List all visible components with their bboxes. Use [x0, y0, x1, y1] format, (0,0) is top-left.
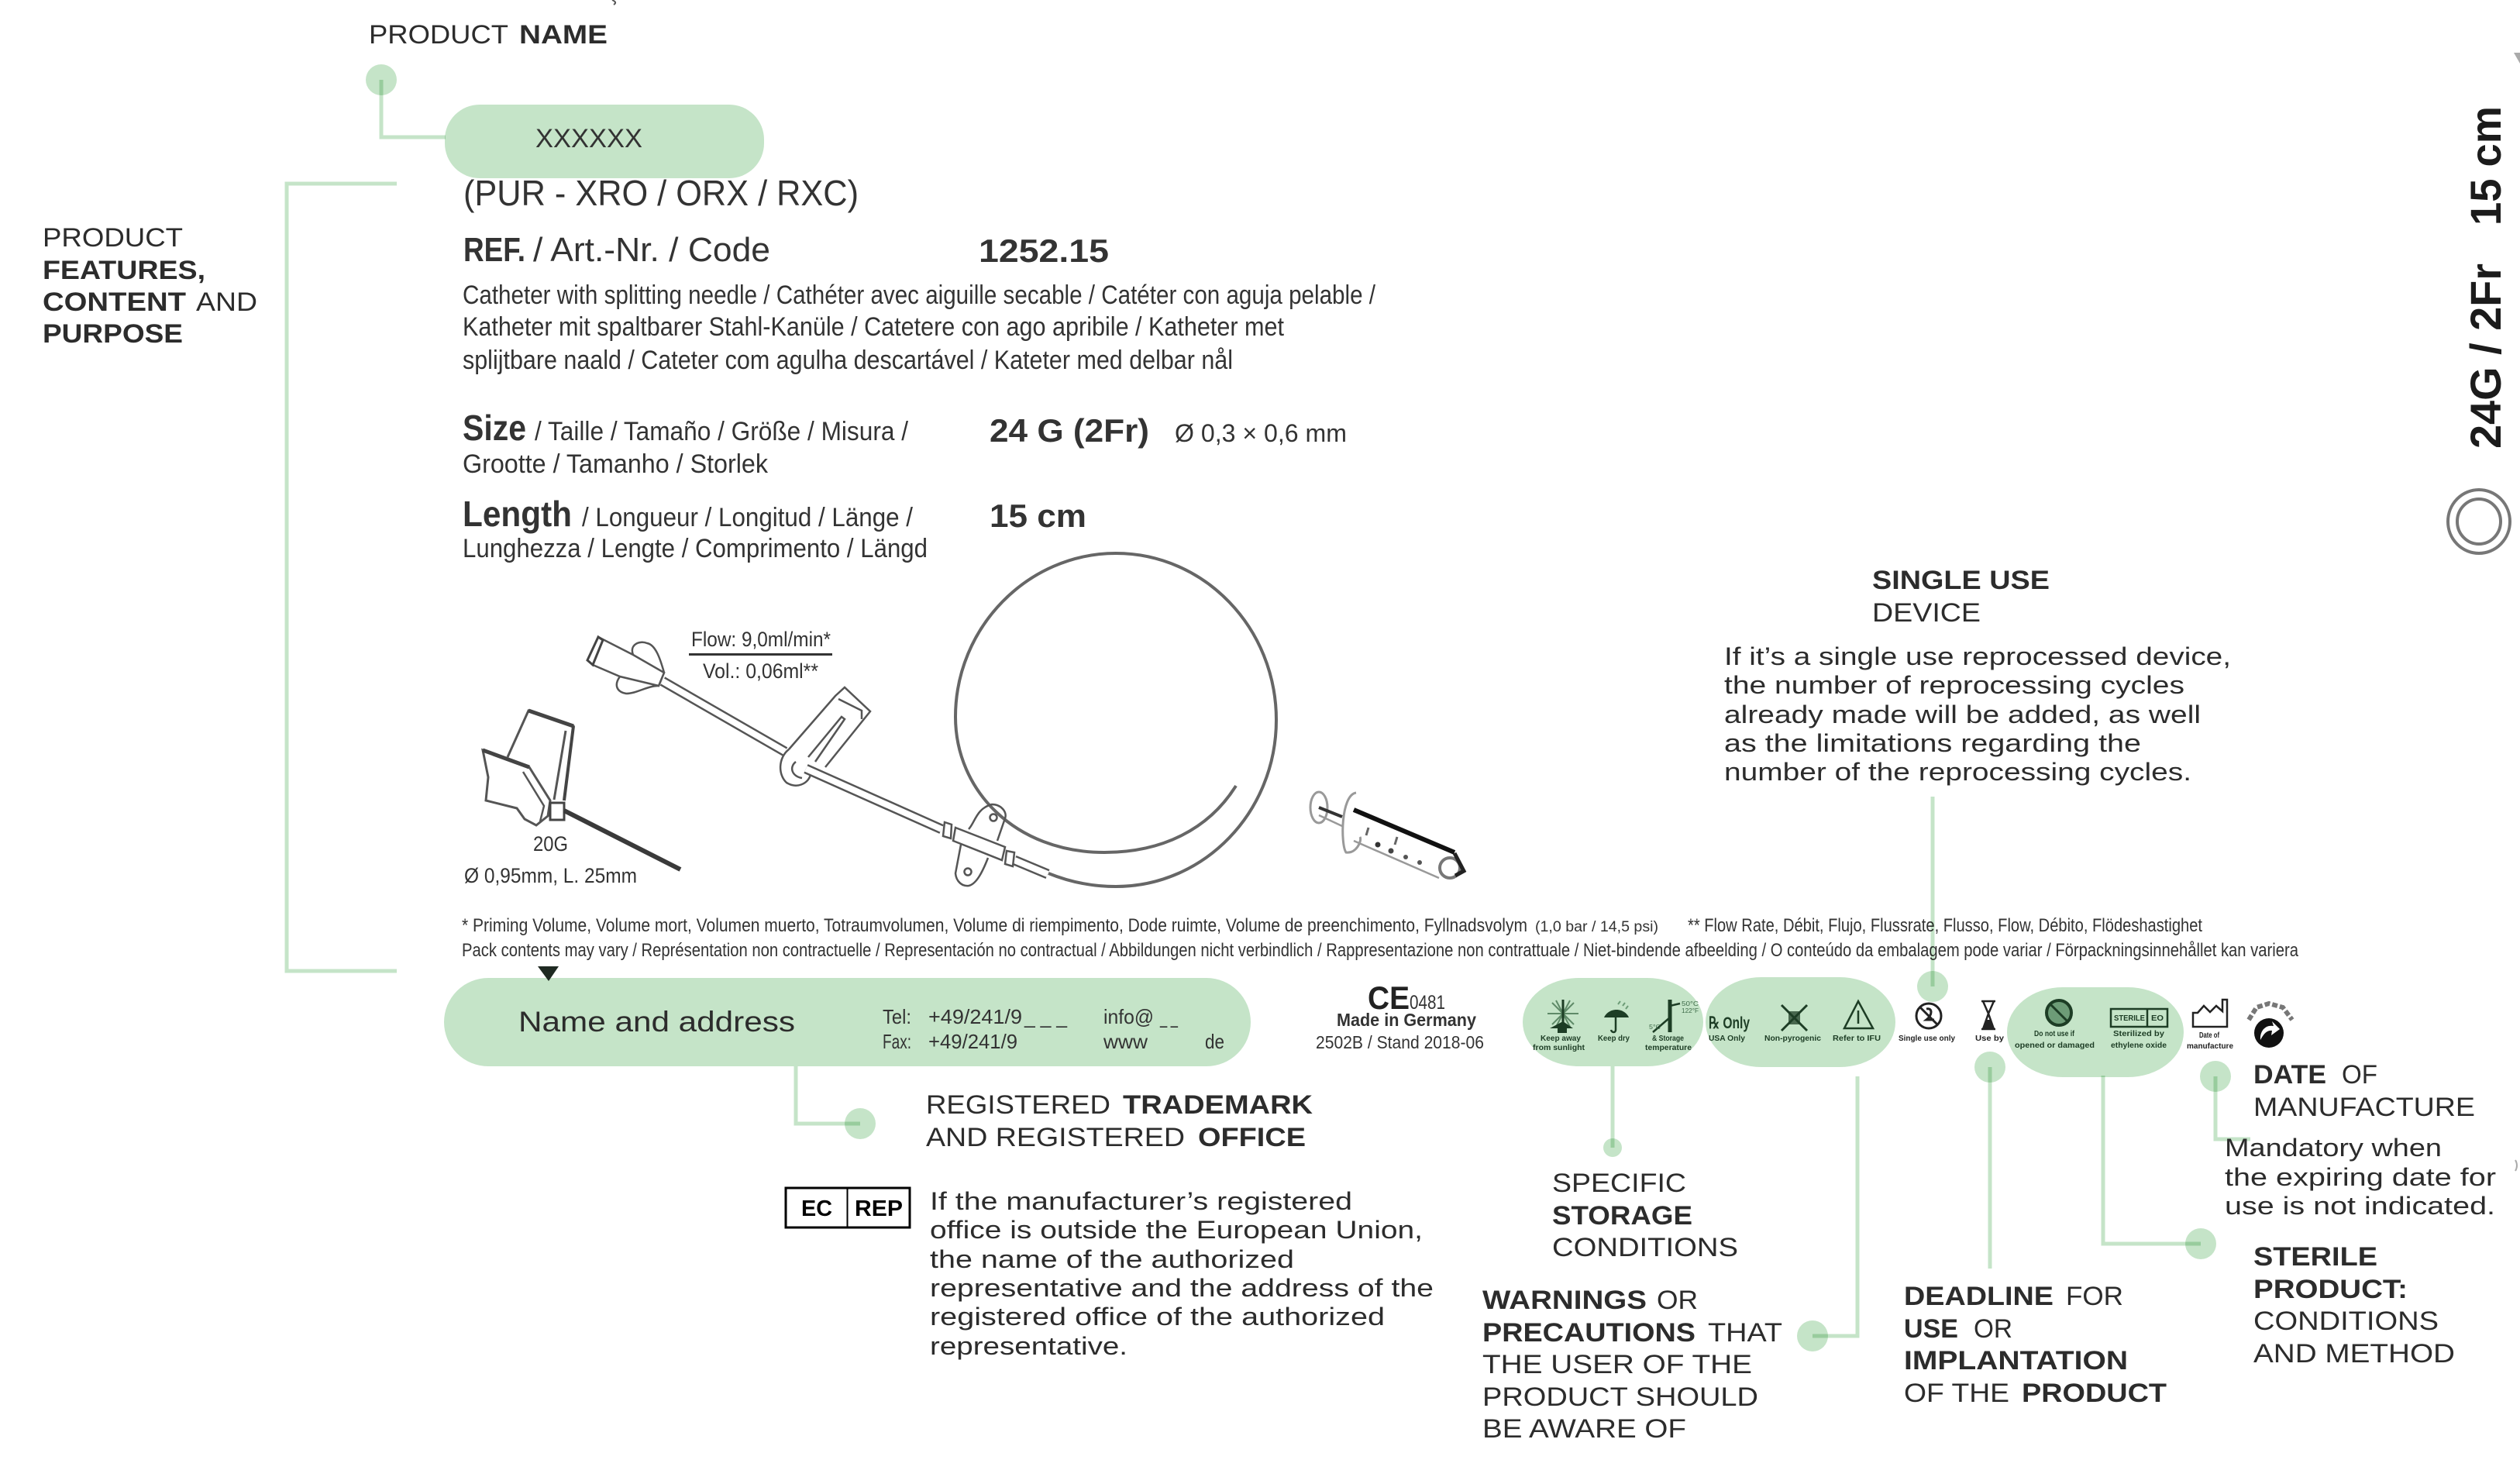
icon: storage temperature: 5°C	[1649, 1024, 1661, 1031]
syringe	[1310, 792, 1464, 878]
explanation	[1724, 642, 2231, 786]
heading: CONTENT	[43, 287, 186, 317]
icon: keep dry	[1598, 1001, 1630, 1043]
CE mark and origin: 0481	[1410, 992, 1445, 1014]
icon: warning triangle	[1833, 1001, 1881, 1043]
scan edge marks	[612, 0, 2520, 1171]
marker dot	[2185, 1228, 2216, 1259]
heading	[43, 223, 257, 349]
connector	[1931, 797, 1934, 986]
explanation: the number of reprocessing cycles	[1724, 671, 2184, 699]
heading: PRODUCT	[2022, 1379, 2167, 1408]
size row: 24 G (2Fr)	[990, 412, 1149, 449]
icon: storage temperature: temperature	[1645, 1043, 1692, 1052]
heading: FOR	[2066, 1282, 2123, 1311]
heading: CONDITIONS	[2253, 1307, 2439, 1336]
heading: TRADEMARK	[1123, 1090, 1313, 1120]
heading: OF THE	[1904, 1379, 2009, 1408]
heading: PRODUCT	[43, 223, 183, 253]
icon: sterile EO: EO	[2151, 1014, 2164, 1023]
icon: USA only: ℞ Only	[1709, 1014, 1750, 1032]
product label scan	[462, 0, 2520, 1171]
product description: splijtbare naald / Cateter com agulha descartável / Kateter med delbar nål	[463, 346, 1233, 375]
explanation: use is not indicated.	[2225, 1192, 2495, 1220]
size row	[463, 408, 1347, 479]
explanation: If it’s a single use reprocessed device,	[1724, 642, 2231, 670]
contact details: +49/241/9	[928, 1030, 1017, 1053]
heading: DEADLINE	[1904, 1282, 2054, 1311]
annotation: sterile product	[2103, 1076, 2455, 1369]
annotation: storage conditions	[1552, 1066, 1738, 1262]
contact details: Fax:	[883, 1030, 911, 1053]
CE mark and origin: CE	[1368, 980, 1410, 1016]
flow and volume: Flow: 9,0ml/min*	[691, 628, 831, 651]
explanation: already made will be added, as well	[1724, 701, 2201, 728]
connector	[796, 1066, 860, 1124]
icon: non pyrogenic	[1764, 1005, 1821, 1043]
heading: AND METHOD	[2253, 1339, 2455, 1369]
explanation: office is outside the European Union,	[930, 1216, 1423, 1244]
marker dot	[1974, 1052, 2005, 1083]
contact details: Tel:	[883, 1005, 911, 1028]
catheter tube	[663, 681, 1048, 874]
footnotes: (1,0 bar / 14,5 psi)	[1535, 919, 1658, 935]
icon: do not use if damaged: opened or damaged	[2015, 1041, 2095, 1050]
butterfly wing	[943, 804, 1014, 886]
connector	[1988, 1067, 1992, 1269]
contact details: www	[1103, 1030, 1148, 1053]
product description: Catheter with splitting needle / Cathéter avec aiguille secable / Catéter con aguja pelable /	[463, 281, 1375, 310]
icon: storage temperature: 50°C	[1682, 1000, 1699, 1007]
icon: do not use if damaged	[2015, 1000, 2095, 1050]
icon: use by hourglass	[1975, 1001, 2004, 1043]
flow and volume: Vol.: 0,06ml**	[703, 659, 818, 683]
icon: sterile EO: Sterilized by	[2113, 1029, 2164, 1038]
EC REP symbol	[786, 1188, 910, 1227]
icon: sterile EO: STERILE	[2114, 1014, 2145, 1023]
icon: storage temperature	[1645, 1000, 1699, 1052]
label pointer triangle	[538, 966, 559, 981]
annotation: single use device	[1724, 566, 2231, 1002]
heading: FEATURES,	[43, 256, 205, 285]
heading	[369, 20, 608, 50]
icon: keep away from sunlight: from sunlight	[1533, 1043, 1585, 1052]
heading: BE AWARE OF	[1482, 1414, 1686, 1444]
product name value: XXXXXX	[535, 124, 642, 153]
product description	[463, 281, 1375, 375]
marker dot	[2200, 1061, 2231, 1092]
heading: OR	[1657, 1286, 1698, 1315]
highlight: product name pill	[445, 105, 764, 178]
contact details: info@	[1103, 1005, 1154, 1028]
needle gauge: 20G	[533, 832, 568, 856]
icon: keep dry: Keep dry	[1598, 1034, 1630, 1043]
heading: STERILE	[2253, 1242, 2377, 1272]
footnotes	[462, 915, 2299, 961]
highlight: sterile product pill	[2007, 987, 2184, 1077]
contact details: de	[1205, 1030, 1224, 1053]
annotation: registered trademark	[786, 1066, 1434, 1360]
icon: recycling mark	[2249, 1004, 2292, 1048]
annotation: product features	[43, 184, 397, 971]
length row: / Longueur / Longitud / Länge /	[582, 503, 914, 532]
heading	[1872, 566, 2050, 628]
icon: single use	[1899, 1004, 1955, 1043]
reference code row: / Art.-Nr. / Code	[533, 231, 770, 269]
length row: Lunghezza / Lengte / Comprimento / Längd	[463, 534, 928, 563]
length row	[463, 494, 1086, 563]
explanation	[930, 1187, 1434, 1360]
size row: Size	[463, 408, 526, 448]
heading	[2253, 1060, 2475, 1122]
icon: warning triangle: Refer to IFU	[1833, 1034, 1881, 1043]
contact details: +49/241/9	[928, 1005, 1022, 1028]
heading: WARNINGS	[1482, 1286, 1647, 1315]
explanation: If the manufacturer’s registered	[930, 1187, 1352, 1215]
contact details: _ _	[1159, 1005, 1178, 1028]
vertical side label: 24G / 2Fr	[2461, 263, 2510, 449]
size row: / Taille / Tamaño / Größe / Misura /	[535, 417, 909, 446]
heading: PRODUCT:	[2253, 1275, 2408, 1304]
icon: sterile EO	[2111, 1009, 2167, 1050]
annotation: deadline for use	[1904, 1052, 2167, 1408]
heading: PURPOSE	[43, 319, 183, 349]
heading: AND	[196, 287, 257, 317]
heading	[926, 1090, 1313, 1152]
connector	[381, 80, 446, 137]
heading: DATE	[2253, 1060, 2326, 1090]
heading: CONDITIONS	[1552, 1233, 1738, 1262]
size row: Ø 0,3 × 0,6 mm	[1175, 419, 1347, 447]
icon: sterile EO: ethylene oxide	[2111, 1041, 2167, 1050]
explanation: representative and the address of the	[930, 1274, 1434, 1302]
flow and volume	[689, 628, 832, 683]
icon: date of manufacture: manufacture	[2187, 1041, 2233, 1051]
footnotes: * Priming Volume, Volume mort, Volumen muerto, Totraumvolumen, Volume di riempimento, Dode ruimte, Volume de preenchimento, Fyllnadsvolym	[462, 915, 1527, 936]
connector	[1610, 1066, 1615, 1148]
marker dot	[1797, 1320, 1828, 1351]
heading: REGISTERED	[926, 1090, 1110, 1120]
icon: keep away from sunlight	[1533, 1000, 1585, 1052]
marker dot	[845, 1108, 876, 1139]
icon: single use: Single use only	[1899, 1034, 1955, 1043]
icon: date of manufacture	[2187, 1000, 2233, 1051]
heading: PRODUCT	[369, 20, 508, 50]
highlight: storage conditions pill	[1523, 978, 1703, 1066]
marker dot	[1603, 1138, 1622, 1157]
reference code row: 1252.15	[979, 232, 1109, 269]
length row: Length	[463, 494, 572, 534]
highlight: warnings pill	[1706, 977, 1895, 1067]
icon: do not use if damaged: Do not use if	[2034, 1029, 2074, 1038]
explanation: the expiring date for	[2225, 1163, 2496, 1191]
heading: STORAGE	[1552, 1201, 1692, 1231]
connector	[2103, 1076, 2201, 1244]
contact details: _ _ _	[1024, 1005, 1068, 1028]
needle gauge: Ø 0,95mm, L. 25mm	[464, 864, 637, 887]
explanation: as the limitations regarding the	[1724, 729, 2141, 757]
heading: SPECIFIC	[1552, 1169, 1686, 1198]
EC REP symbol: EC	[801, 1196, 832, 1221]
explanation: the name of the authorized	[930, 1245, 1294, 1273]
highlight: name and address pill	[444, 978, 1251, 1066]
icon: storage temperature: 122°F	[1682, 1007, 1699, 1014]
splitting clip	[780, 687, 870, 786]
marker dot	[366, 64, 397, 95]
explanation: number of the reprocessing cycles.	[1724, 758, 2191, 786]
CE mark and origin: 2502B / Stand 2018-06	[1316, 1032, 1484, 1052]
name and address text: Name and address	[518, 1006, 795, 1038]
reference code row: REF.	[463, 231, 525, 269]
explanation: representative.	[930, 1332, 1127, 1360]
heading: AND REGISTERED	[926, 1123, 1185, 1152]
size row: Grootte / Tamanho / Storlek	[463, 449, 769, 479]
splitting needle	[483, 711, 680, 869]
icon: keep away from sunlight: Keep away	[1541, 1034, 1581, 1043]
needle gauge	[464, 832, 637, 887]
heading: PRODUCT SHOULD	[1482, 1382, 1758, 1412]
CE mark and origin: Made in Germany	[1337, 1010, 1476, 1030]
vertical side label	[2448, 106, 2510, 553]
annotation: product name	[366, 20, 608, 137]
length row: 15 cm	[990, 497, 1086, 534]
heading	[1482, 1286, 1782, 1444]
product variants: (PUR - XRO / ORX / RXC)	[463, 173, 859, 213]
connector	[1813, 1076, 1857, 1336]
icon: date of manufacture: Date of	[2199, 1031, 2219, 1040]
heading: SINGLE USE	[1872, 566, 2050, 595]
vertical side label: 15 cm	[2461, 106, 2510, 226]
annotation: warnings	[1482, 1076, 1857, 1444]
EC REP symbol: REP	[855, 1196, 903, 1221]
marker dot	[1917, 971, 1948, 1002]
heading: THAT	[1708, 1318, 1782, 1348]
bracket	[287, 184, 397, 971]
heading: USE	[1904, 1314, 1958, 1344]
heading	[1552, 1169, 1738, 1262]
heading: PRECAUTIONS	[1482, 1318, 1695, 1348]
icon: use by hourglass: Use by	[1975, 1034, 2004, 1043]
contact details	[883, 1005, 1224, 1053]
heading: DEVICE	[1872, 598, 1981, 628]
explanation: Mandatory when	[2225, 1134, 2442, 1162]
catheter illustration	[464, 553, 1464, 887]
heading: THE USER OF THE	[1482, 1350, 1752, 1379]
heading: NAME	[519, 20, 608, 50]
heading	[2253, 1242, 2455, 1369]
heading: IMPLANTATION	[1904, 1346, 2128, 1375]
icon: USA only: USA Only	[1709, 1034, 1745, 1043]
heading	[1904, 1282, 2167, 1408]
product description: Katheter mit spaltbarer Stahl-Kanüle / Catetere con ago apribile / Katheter met	[463, 312, 1284, 342]
icon: USA only	[1709, 1014, 1750, 1043]
connector	[2215, 1076, 2250, 1139]
icon: storage temperature: & Storage	[1652, 1034, 1684, 1043]
footnotes: ** Flow Rate, Débit, Flujo, Flussrate, Flusso, Flow, Débito, Flödeshastighet	[1688, 915, 2202, 936]
luer connector	[587, 637, 664, 694]
heading: OFFICE	[1198, 1123, 1306, 1152]
heading: OR	[1974, 1314, 2012, 1344]
heading: MANUFACTURE	[2253, 1093, 2475, 1122]
CE mark and origin	[1316, 980, 1484, 1052]
reference code row	[463, 231, 1109, 269]
explanation	[2225, 1134, 2496, 1220]
icon: non pyrogenic: Non-pyrogenic	[1764, 1034, 1821, 1043]
heading: OF	[2342, 1060, 2377, 1090]
annotation: date of manufacture	[2200, 1060, 2496, 1220]
coiled catheter	[955, 553, 1276, 887]
explanation: registered office of the authorized	[930, 1303, 1385, 1331]
